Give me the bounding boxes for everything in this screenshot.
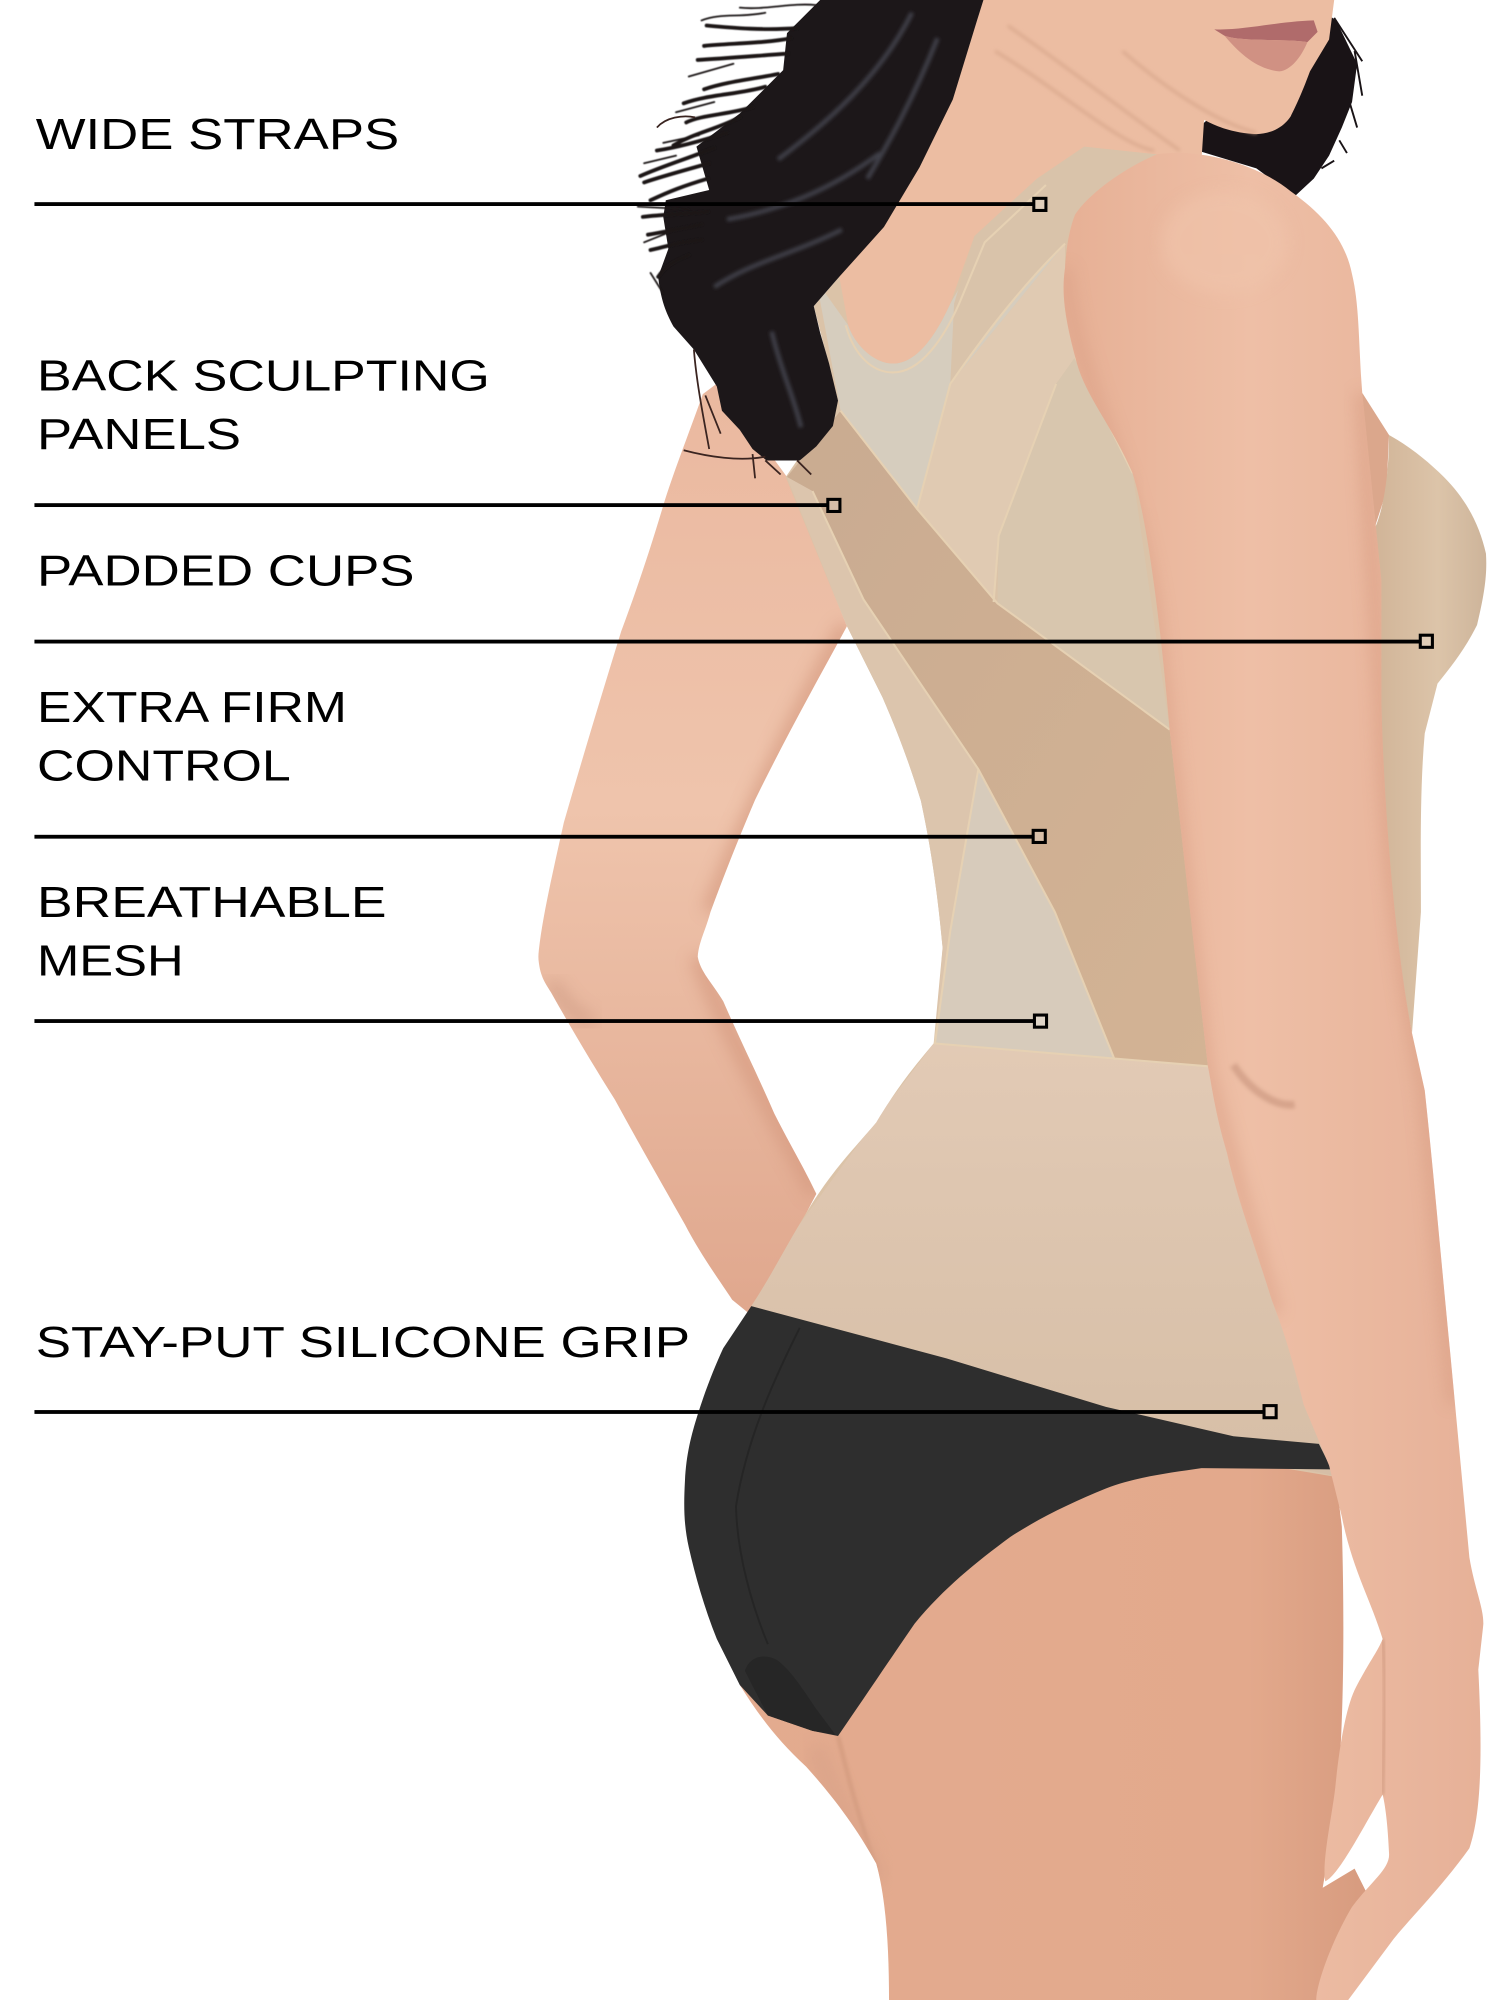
leader line (34, 503, 828, 507)
label: WIDE STRAPS (36, 111, 399, 159)
label (37, 352, 490, 459)
marker (1034, 198, 1046, 210)
underwear gusset (745, 1657, 835, 1735)
leader line (34, 835, 1033, 839)
label: PADDED CUPS (37, 547, 415, 595)
panel: wide strap (950, 206, 1064, 382)
panel: lower control section (752, 1044, 1235, 1305)
label: BACK SCULPTING (37, 352, 490, 400)
marker (1034, 1015, 1047, 1027)
marker (1033, 830, 1045, 842)
leader line (34, 1019, 1034, 1023)
label: MESH (37, 938, 184, 986)
thigh (740, 1468, 1366, 2000)
label (37, 879, 386, 986)
callout: stay-put silicone grip (34, 1319, 1276, 1418)
padded cup and front panel (1365, 435, 1486, 1033)
callout: padded cups (34, 547, 1432, 647)
panel: breathable mesh (935, 769, 1115, 1060)
lips (1214, 20, 1318, 71)
label: EXTRA FIRM (37, 684, 347, 732)
garment panels (752, 184, 1235, 1305)
near arm (1052, 140, 1492, 2000)
callout: extra firm control (34, 684, 1045, 842)
label (37, 684, 347, 791)
label: PANELS (37, 411, 241, 459)
panel: side panel (812, 490, 942, 952)
far arm (538, 384, 847, 1312)
hair wisps (657, 116, 811, 478)
marker (1264, 1406, 1276, 1418)
panel: back sculpting (917, 244, 1075, 603)
photo: model wearing shapewear (523, 0, 1492, 2000)
panel: extra firm control band (787, 411, 1208, 1066)
hair behind face (1202, 13, 1362, 196)
marker (828, 499, 840, 511)
face and neck (835, 0, 1334, 370)
hair strands (638, 5, 816, 293)
hair highlights (714, 13, 938, 427)
leader line (34, 640, 1421, 643)
chest skin (1352, 393, 1389, 531)
leader line (34, 202, 1033, 206)
panel: side mesh (997, 357, 1170, 730)
underwear seam (736, 1328, 800, 1644)
underwear (684, 1306, 1332, 1736)
marker (1420, 635, 1432, 647)
garment seams (812, 185, 1208, 1066)
leader line (34, 1410, 1264, 1414)
hair (638, 0, 983, 478)
panel: upper back mesh (816, 204, 1065, 509)
garment body (751, 147, 1352, 1480)
label: STAY-PUT SILICONE GRIP (36, 1319, 690, 1367)
callout: wide straps (34, 111, 1046, 210)
neck creases (995, 26, 1256, 151)
callout: back sculpting panels (34, 352, 840, 511)
label: BREATHABLE (37, 879, 386, 927)
callout: breathable mesh (34, 879, 1047, 1027)
label: CONTROL (37, 743, 291, 791)
